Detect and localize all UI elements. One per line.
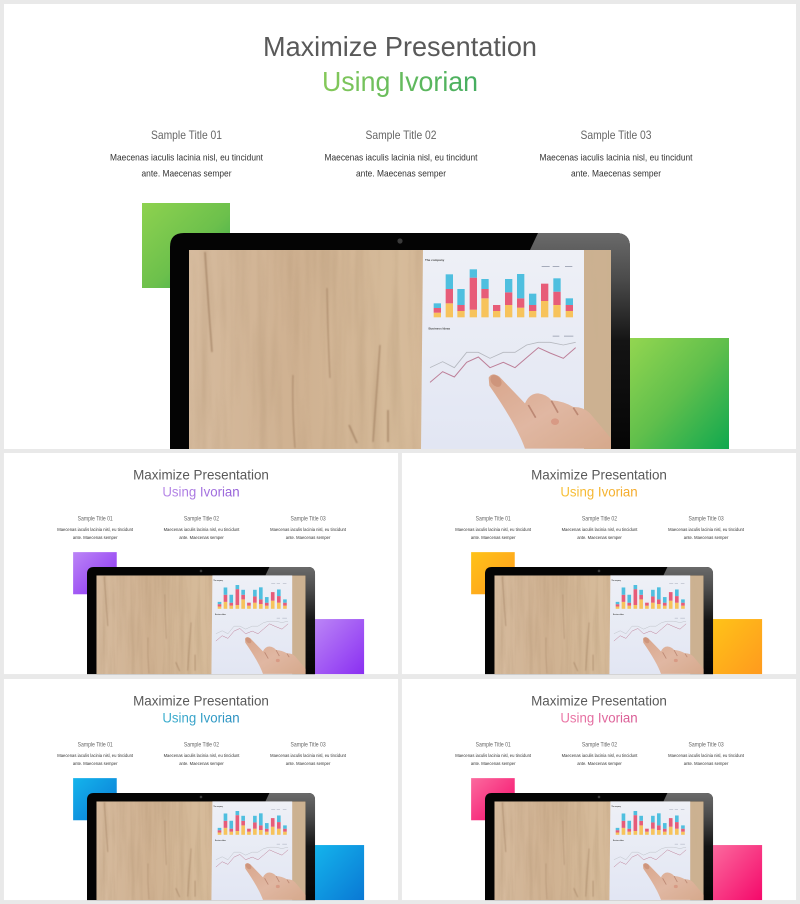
column 1 text: Maecenas iaculis lacinia nisl, eu tincidunt [455,527,532,532]
column 1 text: Sample Title 01 [476,742,511,748]
column 1 text: Sample Title 01 [151,128,222,142]
column 2 text: Sample Title 02 [184,742,219,748]
column 3 text: Maecenas iaculis lacinia nisl, eu tincidunt [668,753,745,758]
accent square left [142,203,230,288]
column 2 text: Sample Title 02 [366,128,437,142]
laptop with chart photo [87,567,315,674]
column 3 text: Sample Title 03 [688,742,724,748]
panel: pink slide [402,679,796,900]
title: Maximize Presentation [263,31,537,62]
accent square left [471,778,515,820]
column 1 text: Maecenas iaculis lacinia nisl, eu tincidunt [57,753,134,758]
column 3 text [270,742,347,766]
panel: green main slide [4,4,796,449]
column 1 text: ante. Maecenas semper [142,168,232,178]
column 2 text: Sample Title 02 [582,742,617,748]
accent square left [73,552,117,594]
column 1 text: ante. Maecenas semper [73,761,118,766]
column 2 text: Maecenas iaculis lacinia nisl, eu tincidunt [562,753,638,758]
column 3 text: ante. Maecenas semper [286,535,331,540]
panel: orange slide [402,453,796,674]
panel: blue slide [4,679,398,900]
column 1 text: ante. Maecenas semper [471,535,516,540]
subtitle: Using Ivorian [162,485,240,500]
column 2 text: Maecenas iaculis lacinia nisl, eu tincidunt [164,527,240,532]
column 1 text [455,742,532,766]
column 1 text [57,742,134,766]
column 3 text [540,128,693,178]
title: Maximize Presentation [531,693,667,708]
laptop with chart photo [485,567,713,674]
column 2 text [324,128,478,178]
column 3 text [270,516,347,540]
column 2 text: ante. Maecenas semper [356,168,446,178]
subtitle: Using Ivorian [322,66,478,97]
column 1 text [57,516,134,540]
title: Maximize Presentation [133,467,269,482]
accent square right [630,338,729,449]
column 3 text: Maecenas iaculis lacinia nisl, eu tincidunt [540,152,693,162]
laptop with chart photo [170,233,630,449]
column 2 text [164,516,240,540]
column 3 text [668,742,745,766]
column 1 text: ante. Maecenas semper [471,761,516,766]
column 2 text [562,516,638,540]
column 3 text [668,516,745,540]
column 2 text: ante. Maecenas semper [179,535,224,540]
column 3 text: Maecenas iaculis lacinia nisl, eu tincidunt [270,753,347,758]
column 2 text: Maecenas iaculis lacinia nisl, eu tincidunt [164,753,240,758]
accent square left [471,552,515,594]
column 3 text: ante. Maecenas semper [286,761,331,766]
column 3 text: ante. Maecenas semper [684,535,729,540]
column 1 text: Sample Title 01 [476,516,511,522]
column 1 text [110,128,263,178]
column 2 text [164,742,240,766]
column 3 text: Maecenas iaculis lacinia nisl, eu tincidunt [270,527,347,532]
column 2 text: Maecenas iaculis lacinia nisl, eu tincidunt [324,152,478,162]
column 3 text: ante. Maecenas semper [571,168,661,178]
column 2 text: ante. Maecenas semper [577,535,622,540]
column 2 text: Maecenas iaculis lacinia nisl, eu tincidunt [562,527,638,532]
column 1 text: Maecenas iaculis lacinia nisl, eu tincidunt [455,753,532,758]
title: Maximize Presentation [133,693,269,708]
column 1 text [455,516,532,540]
column 2 text: Sample Title 02 [582,516,617,522]
laptop with chart photo [87,793,315,900]
panel: purple slide [4,453,398,674]
column 3 text: Maecenas iaculis lacinia nisl, eu tincidunt [668,527,745,532]
title: Maximize Presentation [531,467,667,482]
column 1 text: ante. Maecenas semper [73,535,118,540]
column 2 text: ante. Maecenas semper [577,761,622,766]
subtitle: Using Ivorian [162,711,240,726]
subtitle: Using Ivorian [560,485,638,500]
column 3 text: Sample Title 03 [290,516,326,522]
column 3 text: Sample Title 03 [580,128,652,142]
accent square right [315,619,364,674]
column 1 text: Maecenas iaculis lacinia nisl, eu tincidunt [110,152,263,162]
column 3 text: Sample Title 03 [290,742,326,748]
column 2 text: Sample Title 02 [184,516,219,522]
column 1 text: Maecenas iaculis lacinia nisl, eu tincidunt [57,527,134,532]
accent square left [73,778,117,820]
accent square right [315,845,364,900]
subtitle: Using Ivorian [560,711,638,726]
accent square right [713,619,762,674]
accent square right [713,845,762,900]
column 2 text [562,742,638,766]
column 1 text: Sample Title 01 [78,742,113,748]
column 3 text: ante. Maecenas semper [684,761,729,766]
column 2 text: ante. Maecenas semper [179,761,224,766]
column 3 text: Sample Title 03 [688,516,724,522]
column 1 text: Sample Title 01 [78,516,113,522]
laptop with chart photo [485,793,713,900]
